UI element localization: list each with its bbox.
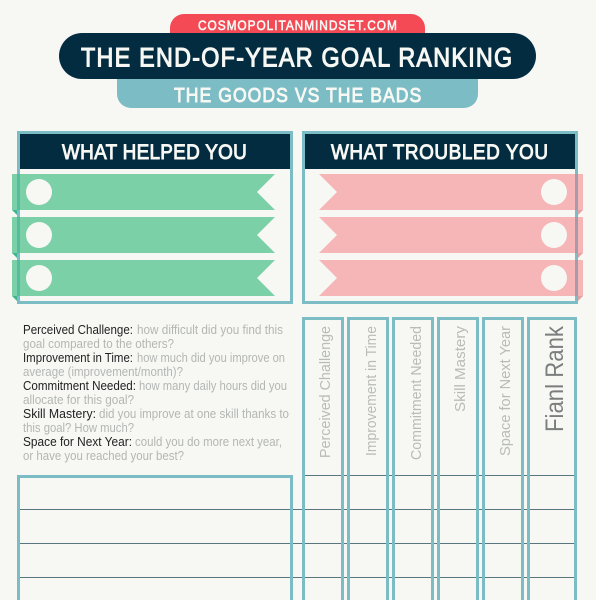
text block: criteria definitions: allocate for this goal?	[23, 392, 134, 407]
text block: criteria definitions: Skill Mastery:	[23, 406, 96, 421]
text block: criteria definitions	[23, 322, 289, 463]
pink ribbon 1	[319, 174, 583, 215]
panel: what helped you	[12, 132, 292, 302]
title pill	[59, 33, 536, 79]
text block: criteria definitions: how many daily hours did you	[139, 378, 287, 393]
pink ribbon 2	[319, 217, 583, 258]
website label pill	[170, 14, 425, 38]
column: commitment needed: Commitment Needed	[408, 326, 425, 460]
heading: what troubled you	[305, 134, 575, 169]
text block: criteria definitions: Space for Next Year:	[23, 434, 132, 449]
column: skill mastery	[438, 318, 478, 600]
website label pill: COSMOPOLITANMINDSET.COM	[198, 17, 397, 33]
panel frame	[304, 132, 576, 302]
column: commitment needed	[394, 318, 432, 600]
text block: criteria definitions: how much did you improve on	[137, 350, 285, 365]
text block: criteria definitions: could you do more next year,	[135, 434, 282, 449]
heading: what helped you: WHAT HELPED YOU	[62, 141, 247, 164]
column: skill mastery: Skill Mastery	[452, 325, 469, 412]
subtitle pill	[117, 70, 478, 108]
text block: criteria definitions: how difficult did you find this	[137, 322, 283, 337]
text block: criteria definitions: Improvement in Time:	[23, 350, 133, 365]
panel: what troubled you	[304, 132, 583, 302]
column: space for next year	[484, 318, 522, 600]
ranking table	[18, 318, 576, 600]
title pill: THE END-OF-YEAR GOAL RANKING	[81, 43, 512, 73]
column: improvement in time: Improvement in Time	[363, 326, 380, 456]
column: final rank: Fianl Rank	[541, 326, 569, 432]
text block: criteria definitions: or have you reached your best?	[23, 448, 184, 463]
column: improvement in time	[348, 318, 388, 600]
text block: criteria definitions: this goal? How much?	[23, 420, 134, 435]
green ribbon 2	[12, 217, 275, 258]
column: perceived challenge	[304, 318, 342, 600]
text block: criteria definitions: Commitment Needed:	[23, 378, 136, 393]
column: final rank	[528, 318, 576, 600]
text block: criteria definitions: Perceived Challenge:	[23, 322, 133, 337]
column: perceived challenge: Perceived Challenge	[317, 326, 334, 458]
text block: criteria definitions: goal compared to the others?	[23, 336, 174, 351]
text block: criteria definitions: did you improve at one skill thanks to	[99, 406, 289, 421]
heading: what troubled you: WHAT TROUBLED YOU	[331, 141, 548, 164]
pink ribbon 3	[319, 260, 583, 301]
column: space for next year: Space for Next Year	[497, 326, 514, 456]
subtitle pill: THE GOODS VS THE BADS	[174, 84, 421, 106]
green ribbon 3	[12, 260, 275, 301]
green ribbon 1	[12, 174, 275, 215]
panel frame	[18, 132, 292, 302]
heading: what helped you	[20, 134, 290, 169]
header banner	[59, 14, 536, 108]
text block: criteria definitions: average (improvement/month)?	[23, 364, 183, 379]
goal names column	[18, 476, 292, 600]
